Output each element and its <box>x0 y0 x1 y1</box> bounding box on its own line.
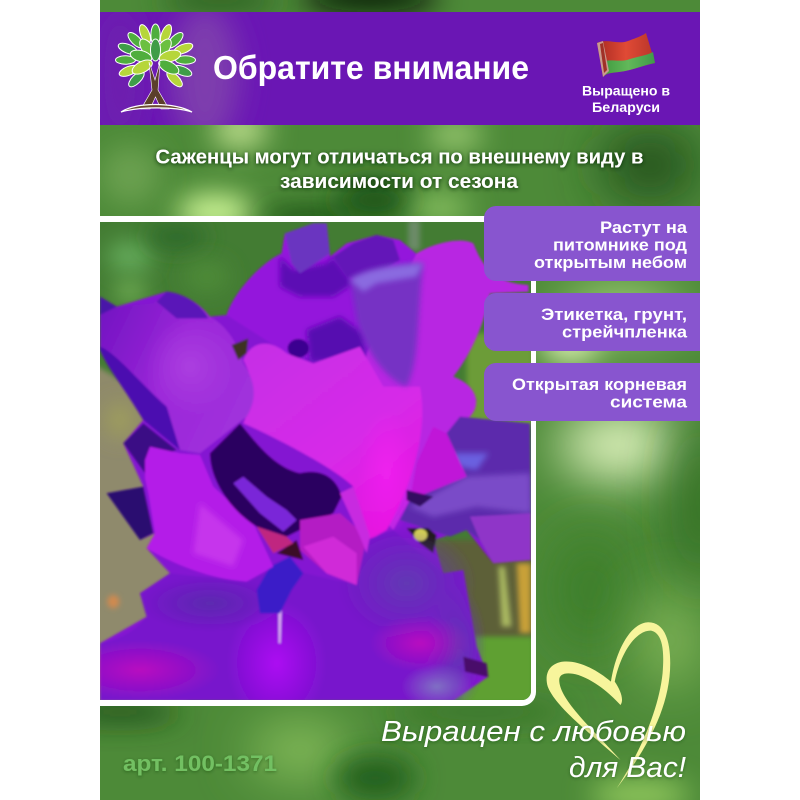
flower: central magenta standard <box>243 344 422 540</box>
icon: tree logo <box>116 23 196 112</box>
flower: left upper fall <box>100 292 254 453</box>
flower: bee <box>407 528 437 553</box>
flower: right fall <box>400 416 531 540</box>
text: grown in Belarus: Выращено в <box>582 84 670 98</box>
text: grown in Belarus <box>582 84 670 115</box>
flower: beard <box>257 557 303 613</box>
text: grown in Belarus: Беларуси <box>592 100 660 115</box>
box: label, soil, stretch film <box>484 293 700 351</box>
box: open root system: Открытая корневая <box>512 375 687 394</box>
slogan: для Вас! <box>569 752 686 784</box>
slogan: Выращен с любовью <box>381 716 686 748</box>
box: open root system <box>484 363 700 421</box>
flower: blue curl <box>350 263 423 387</box>
header band <box>100 12 700 125</box>
box: open root system: система <box>610 392 688 412</box>
article number: арт. 100-1371 <box>123 751 277 776</box>
flower: central small petals <box>300 513 367 585</box>
flower: left lower petal <box>145 447 273 582</box>
list: feature boxes <box>484 206 700 421</box>
icon: yellow heart <box>547 622 670 788</box>
flower: full silhouette <box>100 290 493 700</box>
flower: dark back petals <box>123 423 177 473</box>
slogan <box>381 716 686 784</box>
flower: dark cavity <box>210 423 342 537</box>
subtitle <box>156 146 644 193</box>
flower: lower fall <box>100 530 488 701</box>
subtitle: Саженцы могут отличаться по внешнему виду в <box>156 146 644 168</box>
flower: back standard <box>227 234 418 360</box>
panel: photo frame <box>100 216 536 706</box>
photo: purple iris flower <box>100 222 531 700</box>
box: label, soil, stretch film: Этикетка, грунт, <box>541 305 687 324</box>
box: grown outdoors: открытым небом <box>534 253 687 272</box>
flower: right standard <box>353 241 528 530</box>
box: label, soil, stretch film: стрейчпленка <box>562 322 688 342</box>
box: grown outdoors <box>484 206 700 281</box>
photo background <box>87 220 533 707</box>
title: Обратите внимание <box>213 49 529 86</box>
icon: flag of Belarus <box>597 33 655 77</box>
box: grown outdoors: питомнике под <box>553 236 687 254</box>
box: grown outdoors: Растут на <box>600 218 688 237</box>
subtitle: зависимости от сезона <box>280 171 519 193</box>
